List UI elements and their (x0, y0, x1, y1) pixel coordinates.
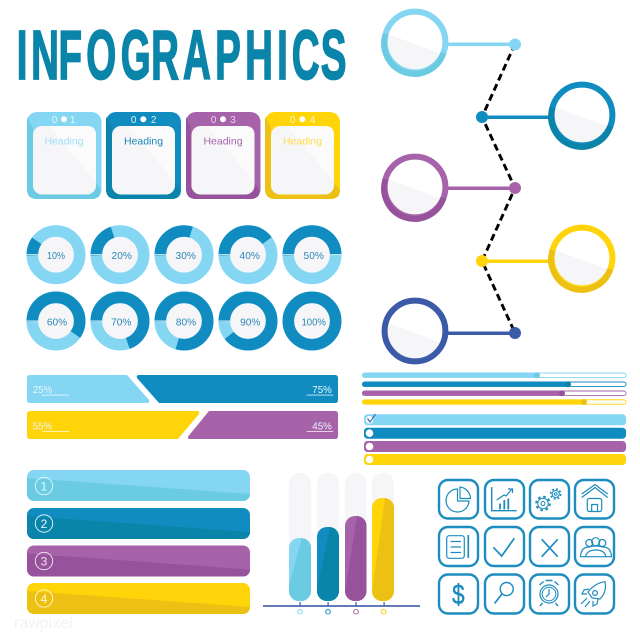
numbered bar 2: 2 (41, 517, 48, 531)
numbered bar 3: 3 (41, 554, 48, 568)
card 02 (106, 112, 181, 199)
card 03: 0 (211, 115, 217, 126)
icon: dollar sign: $ (452, 580, 465, 611)
column 4 (372, 498, 394, 601)
panel: timeline (384, 12, 612, 361)
axis (263, 602, 420, 614)
node 1 (384, 12, 521, 74)
card 01 (27, 112, 102, 199)
icon: house (575, 480, 614, 518)
card 02: 0 (131, 115, 137, 126)
donut 100%: 100% (301, 316, 326, 328)
card 04: 0 (290, 115, 296, 126)
check row blue (364, 428, 626, 439)
icon: dollar sign (439, 574, 478, 614)
node 3 (384, 157, 521, 219)
donut 30% (154, 231, 208, 278)
panel: heading cards (27, 112, 340, 199)
check row yellow (364, 454, 626, 465)
donut 80%: 80% (176, 316, 196, 328)
check row light blue (364, 414, 626, 425)
slider light blue (362, 372, 626, 378)
donut 90% (218, 297, 272, 345)
bar chart (263, 473, 420, 614)
card 03 (186, 112, 260, 199)
numbered bar 1 (27, 470, 250, 501)
donut 60%: 60% (47, 316, 67, 328)
column 3 (345, 516, 366, 601)
donut 40%: 40% (240, 250, 260, 262)
icon: rocket (575, 574, 614, 614)
donut 80% (154, 297, 208, 345)
donut 50% (282, 231, 342, 278)
numbered bar 3 (27, 546, 250, 576)
donut 10% (26, 231, 80, 278)
numbered bar 4: 4 (41, 592, 48, 606)
slider purple (362, 390, 626, 396)
icon: people (575, 527, 614, 566)
panel: percentage donuts (26, 231, 342, 345)
numbered bar 2 (27, 508, 250, 539)
numbered bar 4 (27, 583, 250, 614)
bar 55% (27, 411, 199, 439)
card 02: Heading (124, 136, 163, 148)
donut 100% (288, 297, 336, 345)
icon: gears (530, 480, 569, 518)
bar 45% (188, 411, 338, 439)
card 02: 2 (151, 115, 157, 126)
card 03: 3 (230, 115, 236, 126)
donut 70%: 70% (111, 316, 131, 328)
panel: numbered bars (27, 470, 250, 614)
column 1 (289, 538, 311, 601)
icon: growth chart (485, 480, 524, 518)
icon: pie chart (439, 480, 478, 518)
panel: checklist bars (364, 414, 626, 465)
bar 45%: 45% (312, 420, 332, 432)
card 04: 4 (310, 115, 316, 126)
dashed connector (482, 44, 515, 333)
numbered bar 1: 1 (41, 480, 48, 494)
donut 50%: 50% (304, 250, 324, 262)
card 04 (265, 112, 340, 199)
slider blue (362, 381, 626, 387)
bar 25% (27, 375, 149, 403)
icon: document (439, 527, 478, 566)
donut 90%: 90% (240, 316, 260, 328)
donut 30%: 30% (176, 250, 196, 262)
donut 60% (26, 297, 80, 345)
column 2 (317, 527, 339, 601)
icon: check mark (485, 527, 524, 566)
donut 20%: 20% (112, 250, 132, 262)
watermark: rawpixel (14, 615, 73, 632)
bar 75% (137, 375, 338, 403)
node 4 (476, 228, 612, 290)
icon: alarm clock (530, 574, 569, 614)
bar 25%: 25% (33, 384, 52, 396)
panel: icon grid (439, 480, 614, 614)
bar 55%: 55% (33, 420, 52, 432)
bar 75%: 75% (312, 384, 332, 396)
check row purple (364, 441, 626, 452)
panel: progress sliders (362, 372, 626, 405)
slider yellow (362, 399, 626, 405)
icon: magnifier (485, 574, 524, 614)
donut 40% (218, 231, 272, 278)
card 01: 0 (52, 115, 58, 126)
card 01: 1 (70, 115, 76, 126)
card 04: Heading (283, 136, 322, 148)
node 5 (385, 301, 521, 361)
donut 70% (90, 297, 144, 345)
node 2 (476, 85, 612, 147)
title: INFOGRAPHICS (17, 16, 346, 94)
card 03: Heading (203, 136, 243, 148)
donut 10%: 10% (47, 250, 65, 262)
panel: split percentage bars (27, 375, 338, 439)
card 01: Heading (44, 136, 84, 148)
icon: cross (530, 527, 569, 566)
donut 20% (90, 231, 144, 278)
